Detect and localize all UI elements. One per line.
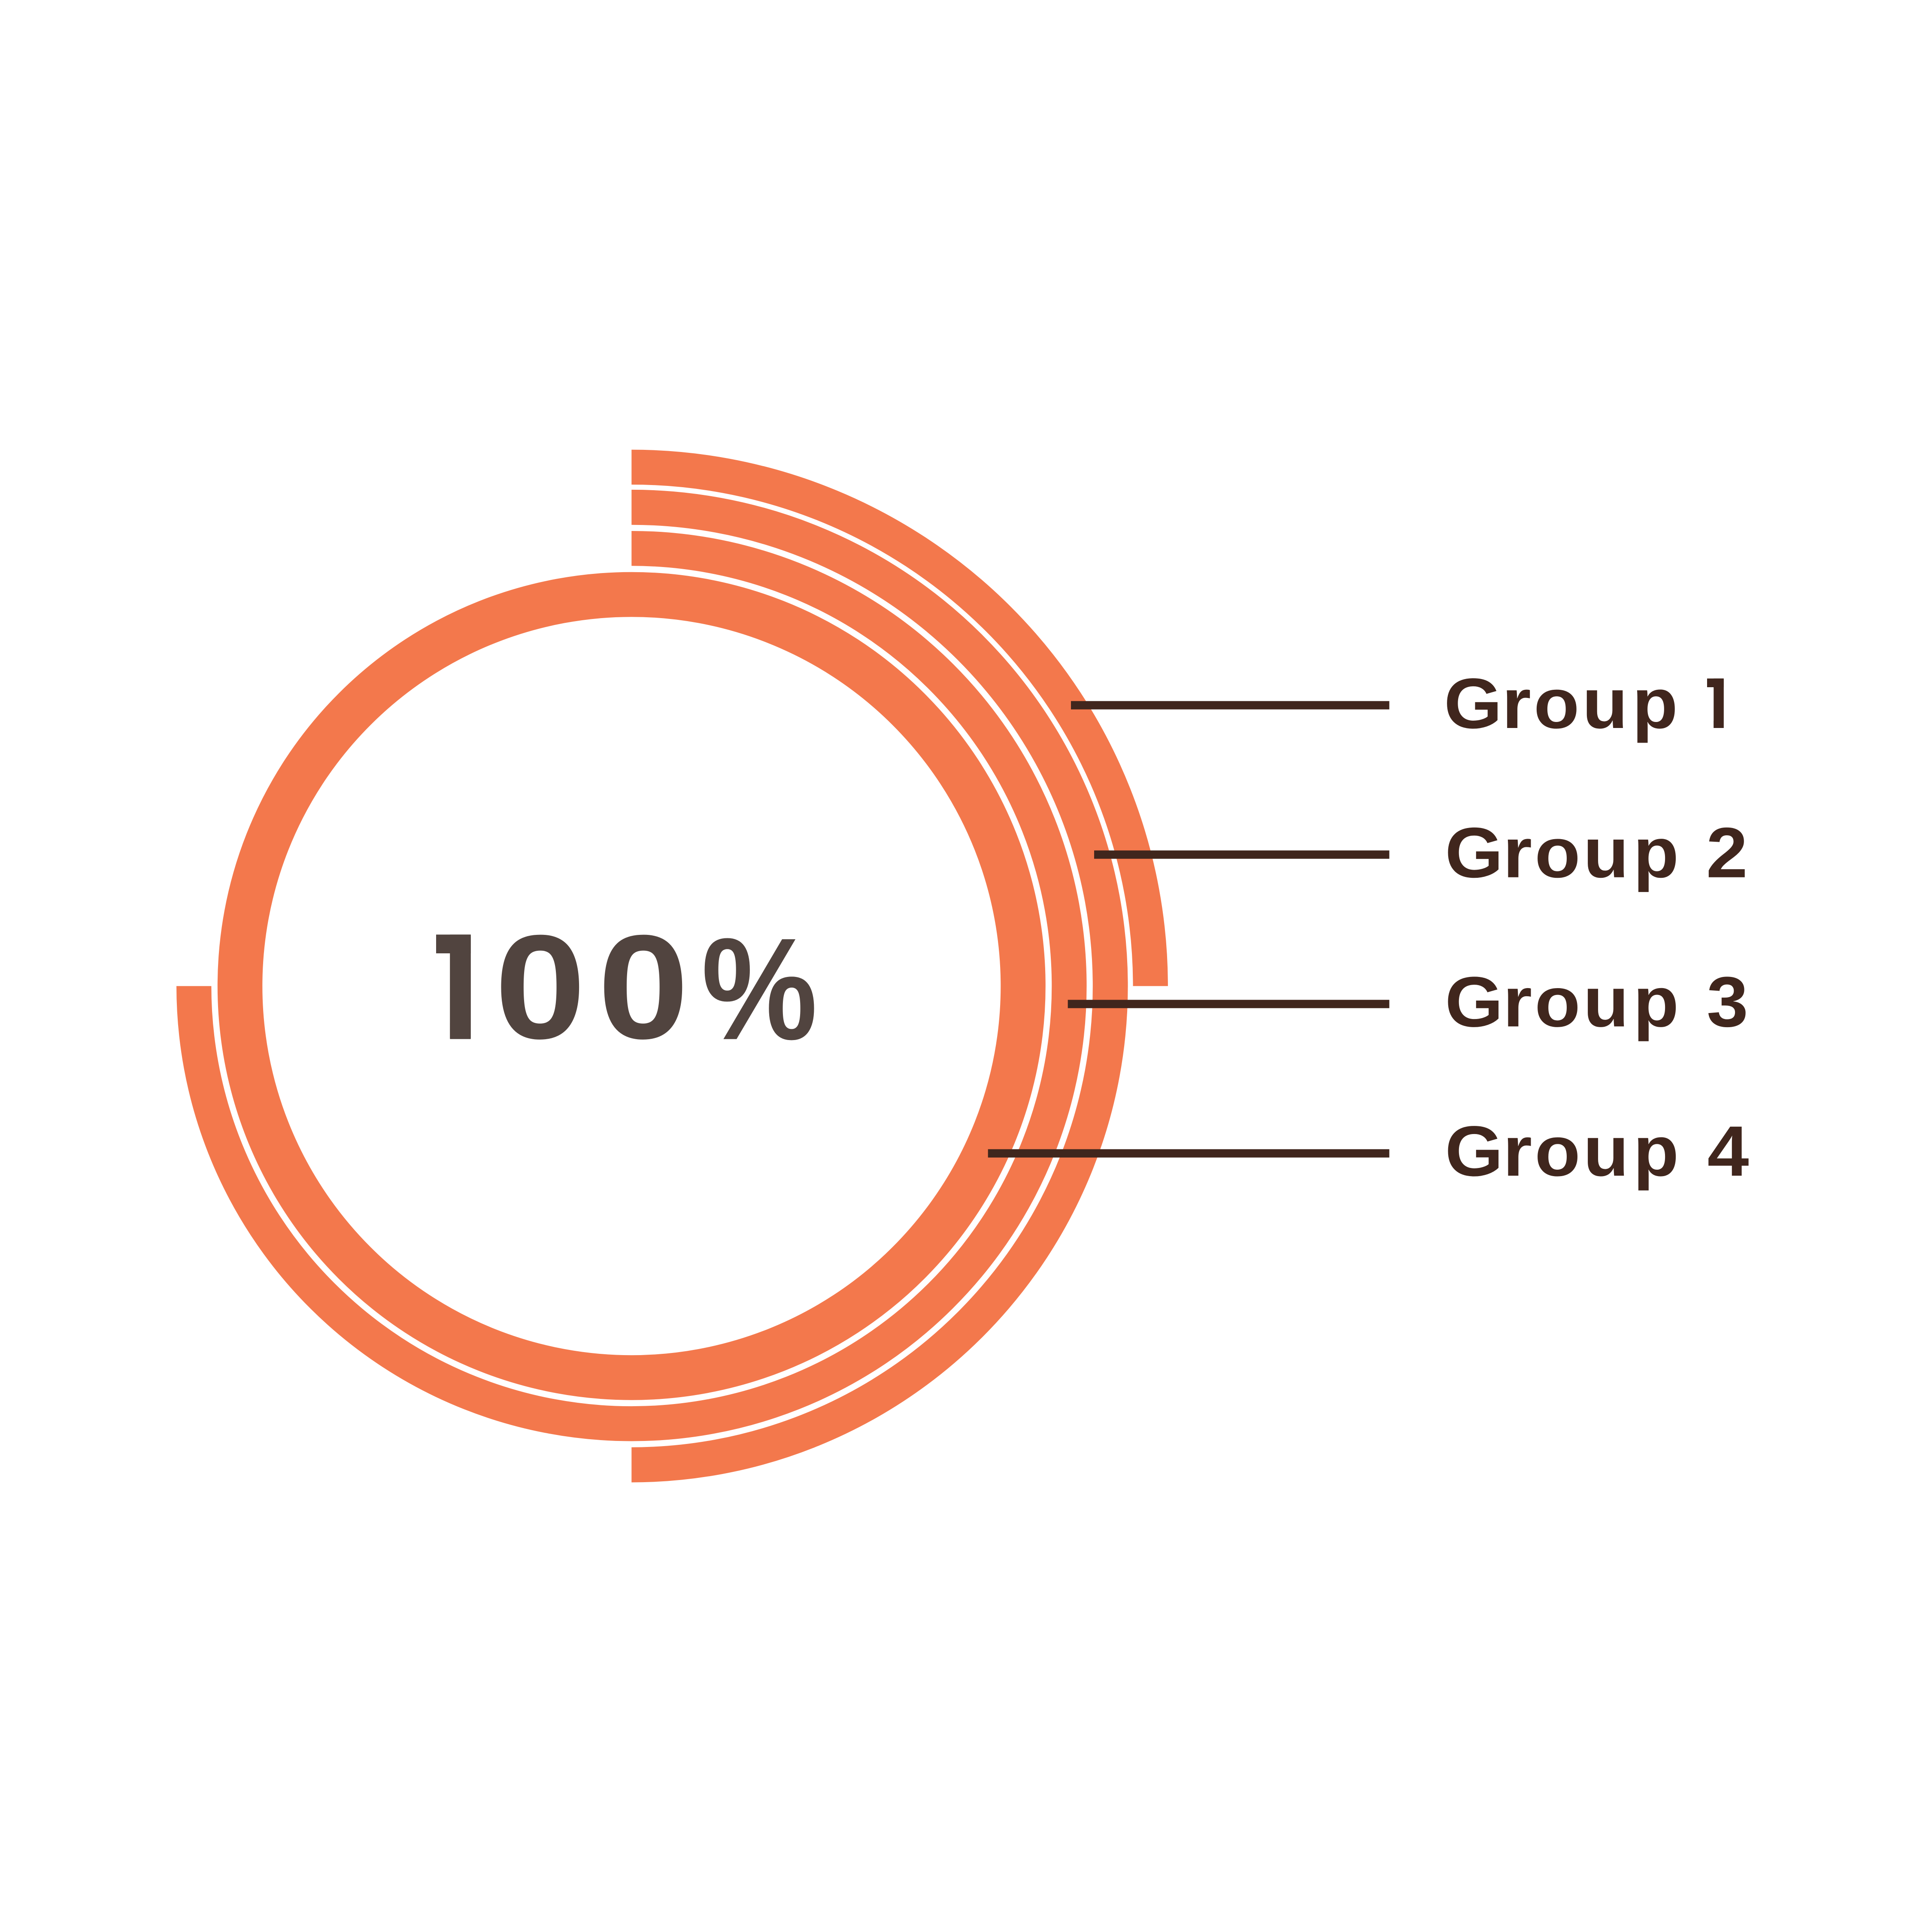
arc: Group 1, quarter ring [631,467,1150,986]
leader line: Group 3 [1068,1000,1389,1008]
digits 100 [436,934,682,1040]
percent sign: % [701,908,818,1070]
leader line: Group 4 [988,1149,1389,1158]
label: Group 1: Group 1 [1444,664,1738,743]
digits 100: 100 [412,905,689,1070]
radial chart [194,467,1150,1465]
label: Group 3: Group 3 [1445,962,1748,1042]
centre value: 100% [436,934,814,1040]
legend labels [1444,664,1749,1191]
arc: Group 3, three-quarter ring [194,549,1069,1424]
leader line: Group 1 [1071,701,1389,710]
arc: Group 2, half ring [631,507,1110,1465]
infographic canvas [176,450,1749,1483]
ring: Group 4, full circle [240,594,1023,1377]
label: Group 4: Group 4 [1445,1112,1749,1191]
leader line: Group 2 [1094,850,1389,859]
label: Group 2: Group 2 [1445,813,1748,893]
leader lines [988,701,1389,1158]
